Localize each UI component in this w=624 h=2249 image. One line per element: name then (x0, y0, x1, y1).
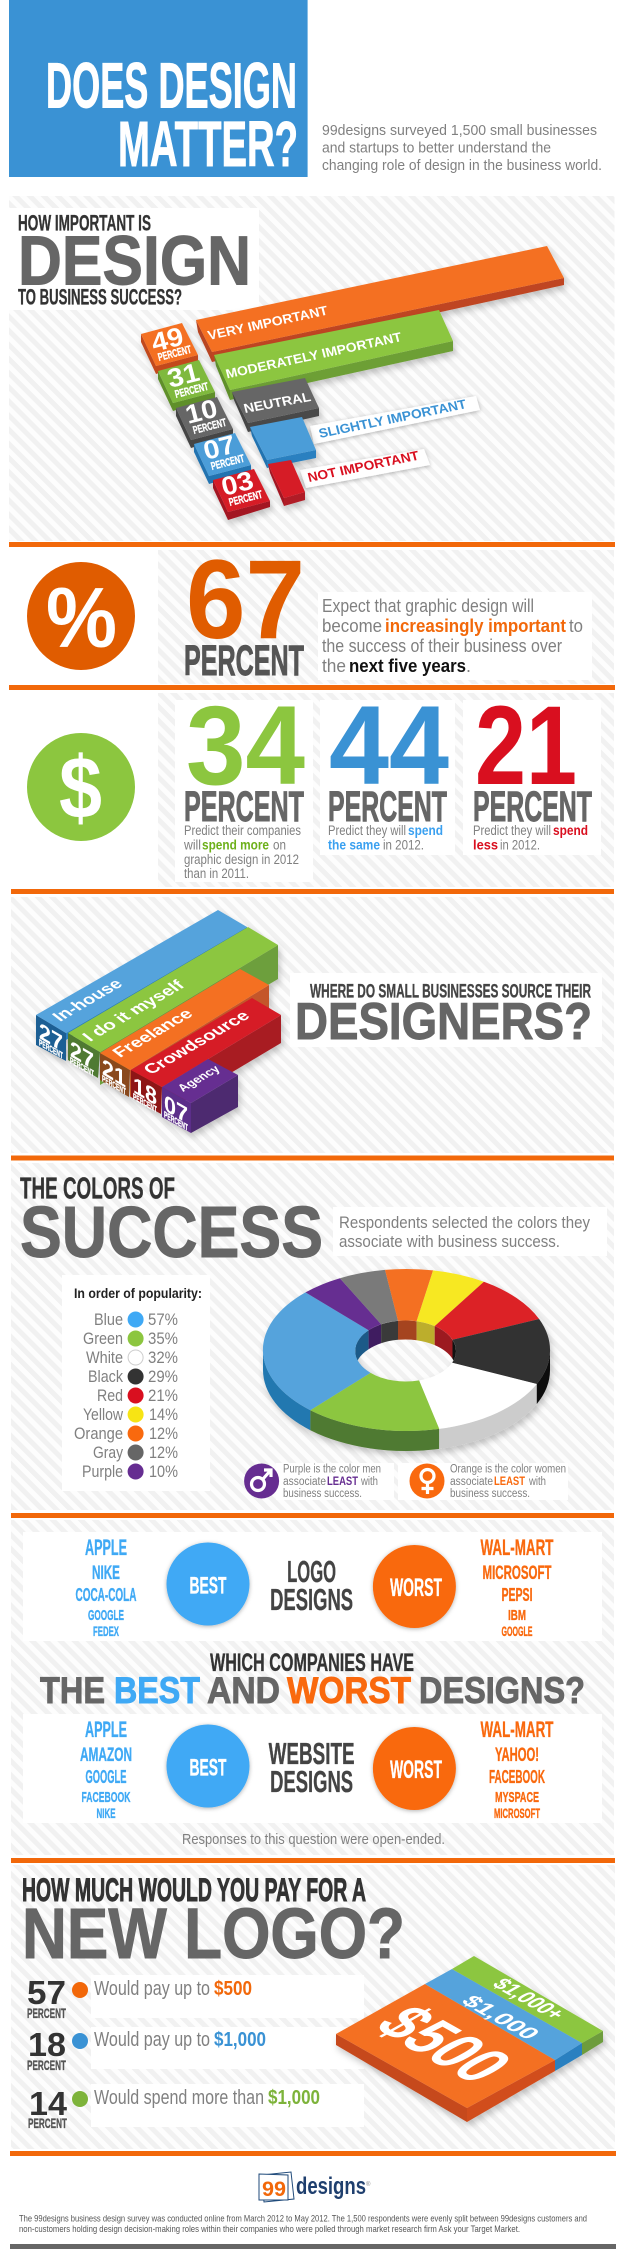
row: 14 percent: Would spend more than (94, 2087, 264, 2109)
header title block: DOES DESIGN (46, 50, 297, 122)
badge: best (166, 1542, 250, 1626)
source percent numbers: 27 (39, 1019, 63, 1057)
callout: purple male (244, 1463, 394, 1500)
divider bar (10, 2151, 616, 2156)
callout: orange female (398, 1463, 568, 1500)
legend: colour popularity: Red (97, 1386, 123, 1405)
icon: dollar circle: $ (59, 738, 102, 837)
intro text (322, 123, 602, 174)
legend: colour popularity: Green (83, 1329, 123, 1348)
legend: colour popularity: 10% (149, 1462, 178, 1481)
list: best logos: FEDEX (93, 1624, 119, 1639)
divider bar (11, 889, 614, 894)
text: 67 percent description (322, 596, 583, 676)
bar chart: importance (196, 246, 564, 506)
text: 67 percent description: the success of their business over (322, 636, 562, 656)
list: best websites: NIKE (96, 1806, 116, 1821)
heading: website designs: DESIGNS (270, 1764, 353, 1799)
row: 14 percent (28, 2084, 364, 2131)
bar: very important (196, 246, 564, 362)
heading: how important is design (9, 208, 259, 310)
heading: the colors of success (20, 1170, 323, 1273)
text: 67 percent description: increasingly important (385, 616, 566, 636)
chart: isometric price slab: $1,000 (456, 1992, 546, 2043)
panel: new logo spend (11, 1865, 615, 2149)
logo: 99designs: ® (366, 2181, 371, 2188)
bar: moderately important (214, 310, 453, 400)
stat: 34 percent: 34 (186, 683, 305, 808)
list: worst logos: WAL-MART (480, 1535, 554, 1560)
bar: i do it myself (68, 927, 278, 1085)
source bar labels: Agency (174, 1063, 224, 1094)
list: worst websites: MICROSOFT (494, 1806, 540, 1821)
percent tile numbers (148, 321, 264, 509)
source bar labels (48, 976, 254, 1094)
legend: colour popularity: Yellow (83, 1405, 124, 1424)
list: best websites: APPLE (85, 1717, 127, 1742)
heading: which companies have the best and worst designs: BEST (114, 1670, 200, 1711)
callout: purple male: business success. (283, 1488, 362, 1500)
bar labels: NEUTRAL (242, 389, 312, 416)
divider bar (9, 542, 615, 547)
intro text: 99designs surveyed 1,500 small businesses (322, 123, 597, 139)
source percent numbers: 07 (164, 1091, 188, 1129)
row: 57 percent: 57 (27, 1974, 66, 2011)
source bar labels: Crowdsource (139, 1008, 254, 1077)
divider bar (11, 1513, 614, 1518)
heading: how important is design: TO BUSINESS SUCCESS? (18, 284, 182, 310)
list: worst logos: MICROSOFT (482, 1562, 552, 1584)
bar: not important (268, 460, 305, 506)
source percent numbers: PERCENT (39, 1038, 63, 1062)
badge: best: BEST (190, 1572, 227, 1600)
legend: colour popularity: White (86, 1348, 123, 1367)
legend: colour popularity: Orange (74, 1424, 123, 1443)
row: 14 percent: PERCENT (28, 2115, 67, 2131)
callout: orange female: associate (450, 1476, 493, 1488)
text: 67 percent description: the (322, 656, 346, 676)
list: best websites (80, 1717, 132, 1821)
stat: 44 percent: 44 (329, 683, 449, 808)
heading: which companies have the best and worst designs: WHICH COMPANIES HAVE (210, 1649, 414, 1677)
callout: purple male: associate (283, 1476, 326, 1488)
row: 14 percent: $1,000 (268, 2087, 320, 2109)
list: worst websites (480, 1717, 554, 1821)
icon: female symbol (410, 1464, 444, 1498)
badge: worst: WORST (390, 1756, 442, 1784)
source percent numbers: 21 (102, 1055, 126, 1094)
panel: website designs (23, 1714, 602, 1823)
stat: 21 percent: spend (553, 823, 588, 838)
heading: website designs: WEBSITE (269, 1736, 355, 1771)
list: best logos: COCA-COLA (76, 1585, 136, 1605)
heading: website designs (269, 1736, 355, 1799)
stat: 44 percent: PERCENT (328, 783, 447, 831)
divider bar (11, 1156, 614, 1160)
header title block: MATTER? (118, 108, 298, 180)
legend: colour popularity: 35% (148, 1329, 178, 1348)
bar labels (206, 303, 468, 485)
percent tile numbers: 10 (182, 393, 221, 430)
panel: 67 percent (158, 537, 614, 685)
stat: 44 percent: in 2012. (383, 838, 424, 852)
heading: which companies have the best and worst designs: THE (40, 1670, 105, 1711)
bar labels: SLIGHTLY IMPORTANT (317, 396, 468, 441)
panel: logo designs (23, 1532, 602, 1641)
list: best logos: GOOGLE (88, 1607, 124, 1624)
heading: how much would you pay for a new logo (22, 1872, 405, 1974)
callout: purple male: LEAST (327, 1476, 358, 1488)
chart: isometric price slab (336, 1956, 603, 2122)
header title block (9, 0, 308, 180)
heading: how important is design: DESIGN (18, 222, 251, 300)
text: 67 percent description: next five years (349, 656, 466, 676)
source percent numbers: PERCENT (102, 1074, 126, 1098)
heading: which companies have the best and worst designs: DESIGNS? (419, 1670, 585, 1711)
stat: 21 percent (463, 683, 601, 855)
stat: 44 percent: the same (328, 838, 380, 852)
percent tile numbers: 03 (218, 465, 257, 502)
stat: 44 percent (320, 683, 455, 855)
icon: percent circle (27, 562, 135, 670)
source percent numbers: PERCENT (70, 1056, 94, 1080)
list: worst websites: WAL-MART (480, 1717, 554, 1742)
logo: 99designs: designs (296, 2173, 366, 2200)
callout: purple male: with (360, 1476, 378, 1488)
badge: worst (373, 1545, 456, 1628)
bar: freelance (100, 969, 269, 1097)
footnote (19, 2214, 587, 2235)
bar: agency (162, 1059, 238, 1133)
callout: purple male: Purple is the color men (283, 1464, 381, 1476)
list: best logos: APPLE (85, 1535, 127, 1560)
bar: neutral (232, 378, 319, 432)
chart: isometric price slab: $1,000+ (487, 1975, 572, 2023)
callout: orange female: with (528, 1476, 546, 1488)
text: 67 percent description: Expect that graphic design will (322, 596, 534, 616)
stat: 34 percent: will (183, 838, 201, 852)
stat: 34 percent: PERCENT (184, 783, 304, 831)
legend: colour popularity: Blue (94, 1310, 123, 1329)
label strip: not important (300, 449, 430, 488)
stat: 67 percent: 67 (186, 537, 305, 662)
badge: best (166, 1724, 250, 1808)
stat: 34 percent: graphic design in 2012 (184, 852, 299, 867)
text: respondents (333, 1207, 607, 1256)
icon: dollar circle (27, 733, 135, 841)
legend: colour popularity: 21% (148, 1386, 178, 1405)
legend: colour popularity: Purple (82, 1462, 123, 1481)
heading: which companies have the best and worst designs: AND (207, 1670, 280, 1711)
stat: 34 percent: spend more (202, 838, 269, 852)
percent tile numbers: 31 (164, 357, 203, 394)
intro text: changing role of design in the business world. (322, 158, 602, 174)
legend: colour popularity (62, 1275, 210, 1491)
stat: 34 percent: Predict their companies (184, 823, 301, 838)
list: worst websites: YAHOO! (495, 1744, 539, 1766)
stat: 44 percent: Predict they will (328, 823, 406, 838)
source percent numbers: PERCENT (164, 1110, 188, 1134)
row: 57 percent: Would pay up to (94, 1978, 210, 2000)
stat: 44 percent: spend (408, 823, 443, 838)
divider bar (9, 685, 615, 690)
stat: 34 percent (175, 683, 313, 882)
legend: colour popularity: 14% (149, 1405, 178, 1424)
stat: 21 percent: in 2012. (500, 838, 540, 852)
list: worst websites: FACEBOOK (489, 1767, 545, 1787)
legend: colour popularity: Gray (93, 1443, 123, 1462)
percent tile numbers: PERCENT (174, 381, 210, 401)
source percent numbers (39, 1019, 188, 1134)
list: worst logos (480, 1535, 554, 1639)
source percent numbers: 27 (70, 1037, 94, 1075)
list: worst logos: PEPSI (502, 1585, 532, 1605)
legend: colour popularity: 32% (148, 1348, 178, 1367)
chart: isometric price slab: $500 (359, 1996, 530, 2092)
row: 18 percent (27, 2026, 364, 2073)
bar labels: VERY IMPORTANT (206, 303, 329, 343)
heading: the colors of success: SUCCESS (20, 1193, 323, 1273)
bar: slightly important (250, 417, 316, 468)
heading: where do small businesses source their designers (290, 973, 602, 1051)
icon: percent circle: % (46, 571, 117, 666)
source bar labels: I do it myself (78, 977, 188, 1044)
percent tile numbers: PERCENT (192, 417, 228, 437)
list: best logos (76, 1535, 136, 1639)
callout: orange female: business success. (450, 1488, 530, 1500)
text: 67 percent description: to (569, 616, 583, 636)
divider bar (11, 1858, 615, 1863)
source bar labels: In-house (48, 976, 127, 1024)
stat: 21 percent: 21 (475, 683, 577, 808)
source percent numbers: 18 (133, 1073, 157, 1112)
heading: where do small businesses source their designers: DESIGNERS? (295, 993, 592, 1051)
source bar labels: Freelance (108, 1006, 197, 1060)
legend: colour popularity: In order of popularity: (74, 1285, 202, 1301)
row: 18 percent: 18 (28, 2026, 66, 2063)
label strip: slightly important (310, 396, 480, 444)
panel: designer sources (11, 897, 614, 1153)
row: 14 percent: 14 (29, 2085, 68, 2122)
text: 67 percent description: become (322, 616, 382, 636)
bar labels: NOT IMPORTANT (306, 448, 421, 485)
row: 57 percent (27, 1974, 364, 2021)
percent tile numbers: PERCENT (228, 489, 264, 509)
stat: 34 percent: than in 2011. (184, 866, 249, 881)
list: worst websites: MYSPACE (495, 1789, 539, 1806)
row: 18 percent: $1,000 (214, 2029, 266, 2051)
logo: 99designs: 99 (262, 2178, 286, 2201)
legend: colour popularity: 12% (149, 1443, 178, 1462)
heading: which companies have the best and worst designs: WORST (287, 1670, 411, 1711)
panel: colors of success (11, 1163, 614, 1510)
footer bar (10, 2244, 616, 2249)
bar labels: MODERATELY IMPORTANT (224, 329, 403, 381)
row: 18 percent: PERCENT (27, 2057, 66, 2073)
list: worst logos: IBM (508, 1607, 526, 1624)
heading: logo designs: DESIGNS (270, 1582, 353, 1617)
bar: in-house (36, 910, 247, 1061)
stat: 67 percent: PERCENT (184, 637, 304, 685)
badge: worst (373, 1727, 456, 1810)
list: best websites: GOOGLE (86, 1767, 126, 1787)
panel: best and worst designs (11, 1520, 614, 1855)
list: best logos: NIKE (92, 1562, 120, 1584)
heading: logo designs: LOGO (287, 1554, 336, 1589)
source percent numbers: PERCENT (133, 1092, 157, 1116)
badge: worst: WORST (390, 1574, 442, 1602)
list: worst logos: GOOGLE (502, 1624, 532, 1639)
callout: orange female: LEAST (494, 1476, 525, 1488)
percent tile numbers: PERCENT (157, 344, 193, 364)
list: best websites: AMAZON (80, 1744, 132, 1766)
heading: how much would you pay for a new logo: NEW LOGO? (22, 1895, 405, 1974)
text: respondents: associate with business success. (339, 1232, 560, 1251)
stat: 34 percent: on (273, 838, 286, 852)
chart: donut of colours (263, 1269, 550, 1451)
footnote: non-customers holding design decision-making roles within their companies who were polled through market research firm Ask your Target Market. (19, 2224, 520, 2235)
heading: how much would you pay for a new logo: HOW MUCH WOULD YOU PAY FOR A (22, 1872, 366, 1908)
heading: logo designs (270, 1554, 353, 1617)
row: 18 percent: Would pay up to (94, 2029, 210, 2051)
intro text: and startups to better understand the (322, 140, 551, 156)
chart: isometric source bars (36, 910, 281, 1133)
text: respondents: Respondents selected the colors they (339, 1213, 590, 1232)
legend: colour popularity: Black (88, 1367, 123, 1386)
callout: orange female: Orange is the color women (450, 1464, 566, 1476)
logo: 99designs (259, 2172, 371, 2202)
percent tile numbers: 07 (200, 429, 239, 466)
legend: colour popularity: 57% (148, 1310, 178, 1329)
percent tile numbers: PERCENT (210, 453, 246, 473)
heading: which companies have the best and worst designs (40, 1649, 585, 1711)
bar: crowdsource (131, 998, 281, 1114)
legend: colour popularity: 12% (149, 1424, 178, 1443)
icon: male symbol (244, 1464, 279, 1498)
percent tile numbers: 49 (148, 321, 187, 358)
row: 57 percent: PERCENT (27, 2005, 66, 2021)
panel: spending predictions (158, 683, 614, 887)
stat: 21 percent: less (473, 838, 498, 852)
heading: the colors of success: THE COLORS OF (20, 1170, 175, 1206)
list: best websites: FACEBOOK (82, 1789, 131, 1806)
note: open-ended responses: Responses to this question were open-ended. (182, 1832, 445, 1848)
text: 67 percent description: . (466, 656, 471, 676)
stat: 21 percent: Predict they will (473, 823, 551, 838)
row: 57 percent: $500 (214, 1978, 252, 2000)
legend: colour popularity: 29% (148, 1367, 178, 1386)
percent tiles (141, 323, 270, 520)
badge: best: BEST (190, 1754, 227, 1782)
heading: how important is design: HOW IMPORTANT IS (18, 210, 151, 236)
